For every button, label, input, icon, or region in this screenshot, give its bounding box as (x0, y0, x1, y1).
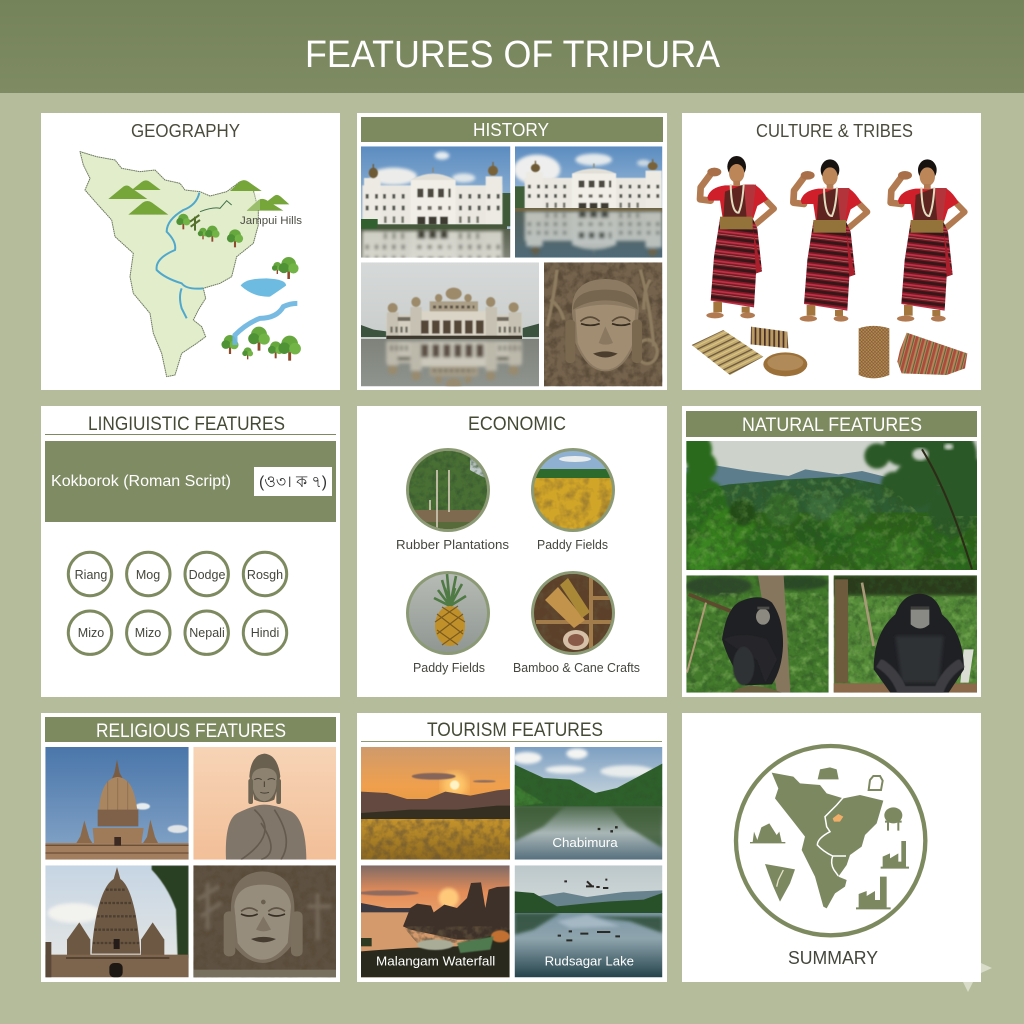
panel: religious features (41, 713, 340, 982)
language names: Mog (136, 568, 160, 582)
icon: hut (884, 807, 902, 831)
decorative corner sparkles (963, 963, 992, 992)
capital marker (833, 814, 843, 822)
script banner: Kokborok (Roman Script) (51, 473, 231, 490)
photo: carved stone face (544, 262, 662, 386)
language names: Riang (75, 568, 107, 582)
heading bar: history (361, 117, 663, 142)
title banner (0, 0, 1024, 93)
icon: palace (818, 767, 839, 779)
heading: summary: SUMMARY (788, 947, 878, 968)
icon: small factory (881, 841, 909, 869)
photo: palace angled (515, 146, 662, 258)
photo circle: paddy field (530, 448, 616, 532)
label: Malangam Waterfall: Malangam Waterfall (376, 954, 495, 968)
panel: tourism features (357, 713, 667, 982)
heading bar: history: HISTORY (473, 120, 549, 140)
language names: Hindi (251, 626, 279, 640)
language names: Mizo (78, 626, 104, 640)
woven cylinder (859, 326, 889, 378)
rolled cane mat (751, 327, 788, 348)
folded textile (897, 333, 967, 375)
photo: Chabimura hills and lake (514, 747, 662, 860)
lake (241, 278, 286, 297)
photo: sunset over paddy (361, 747, 510, 860)
language names: Rosgh (247, 568, 283, 582)
heading: linguistic features: LINGIUISTIC FEATURES (88, 414, 285, 435)
label: Chabimura: Chabimura (552, 836, 618, 850)
photo circle: bamboo and cane crafts (530, 570, 616, 656)
photo circle: pineapple (405, 570, 491, 656)
photo captions: Bamboo & Cane Crafts (513, 661, 640, 675)
heading bar: religious features: RELIGIOUS FEATURES (96, 721, 286, 742)
photo captions (396, 538, 640, 675)
photo captions: Paddy Fields (537, 538, 608, 552)
language names: Dodge (189, 568, 225, 582)
icon: large factory (856, 877, 891, 909)
photo: palace reflected in lake (361, 262, 539, 386)
title banner: FEATURES OF TRIPURA (305, 34, 721, 76)
panel: linguistic features (41, 406, 340, 697)
photo: carved stone Buddha head (193, 865, 336, 978)
photo: seated stone Buddha (193, 747, 336, 860)
small map (765, 864, 795, 902)
panel: natural features (677, 406, 997, 697)
river (235, 303, 297, 345)
photo: Rudsagar Lake (514, 866, 662, 978)
heading: culture and tribes: CULTURE & TRIBES (756, 121, 913, 141)
panel: history (357, 113, 667, 390)
language names (75, 568, 283, 640)
map silhouette (772, 773, 883, 908)
emblem ring (736, 746, 925, 935)
language names: Nepali (189, 626, 225, 640)
heading: geography: GEOGRAPHY (131, 121, 240, 141)
woven mat (692, 330, 763, 375)
language names: Mizo (135, 626, 161, 640)
photo captions: Paddy Fields (413, 661, 485, 675)
photo: Malangam Waterfall at dusk (361, 865, 510, 978)
panel: summary (682, 713, 981, 982)
photo: temple towers (45, 865, 189, 978)
dancer two (793, 159, 867, 322)
panel: economic (357, 406, 667, 697)
dancer three (891, 159, 965, 322)
heading: tourism features: TOURISM FEATURES (427, 720, 603, 741)
icon: temple (750, 823, 785, 843)
heading bar: natural features (686, 411, 977, 437)
panel: culture and tribes (682, 113, 981, 390)
label: Rudsagar Lake: Rudsagar Lake (545, 954, 634, 968)
panel: geography (41, 113, 340, 390)
photo circle: rubber plantation (405, 448, 491, 532)
heading bar: natural features: NATURAL FEATURES (742, 415, 922, 436)
heading bar: religious features (45, 717, 336, 742)
photo: gibbon sitting on branch (686, 575, 829, 693)
heading: economic: ECONOMIC (468, 414, 566, 435)
cane basket (763, 352, 807, 376)
river line (817, 797, 846, 876)
label: Jampui Hills: Jampui Hills (240, 215, 303, 227)
photo: palace front (361, 146, 510, 258)
language badges (68, 552, 287, 654)
script banner: (ও৩। ক ৭) (259, 474, 327, 491)
script banner (45, 441, 336, 522)
photo captions: Rubber Plantations (396, 538, 509, 552)
photo: temple against blue sky (45, 747, 189, 860)
map of Tripura (80, 152, 301, 377)
dancer one (700, 156, 774, 318)
icon: tribal stilt house (869, 776, 883, 790)
photo: forested hills (686, 441, 977, 570)
photo: gibbon in forest (834, 575, 977, 693)
